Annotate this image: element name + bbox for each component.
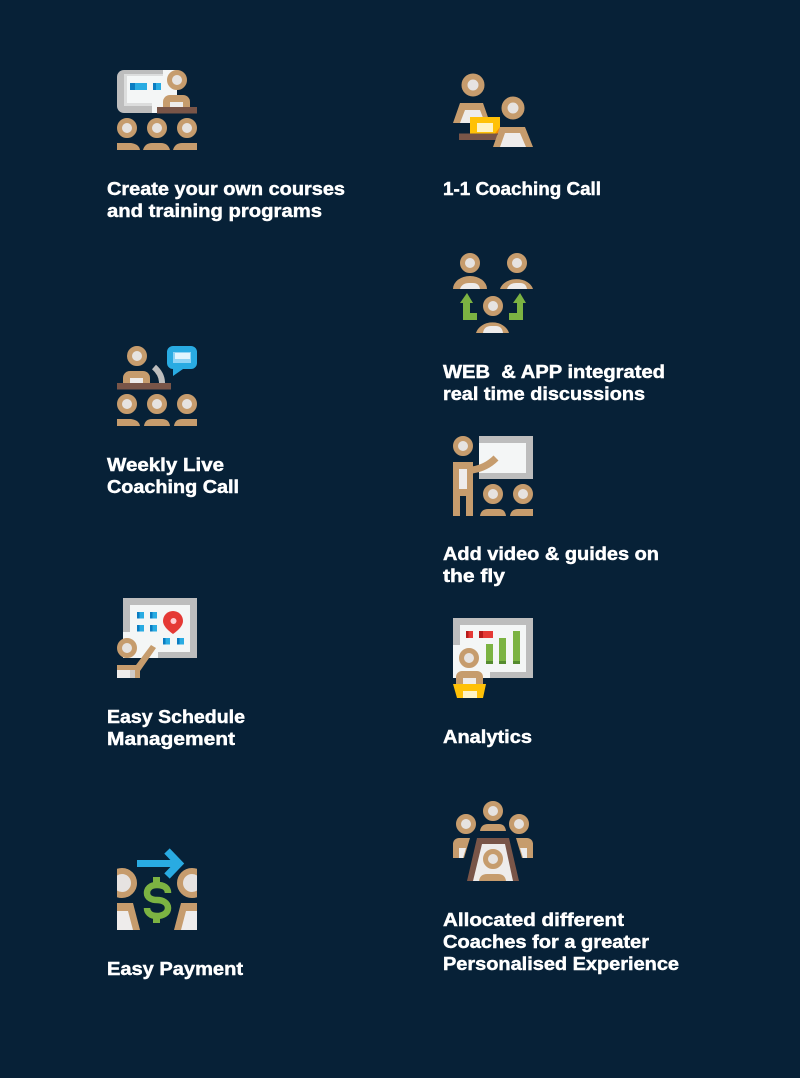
feature: add video and guides [443,436,659,586]
label: video and guides: Add video & guides on [443,544,659,564]
feature: allocated coaches [443,804,679,974]
label: schedule: Easy Schedule [107,707,245,727]
label: courses: and training programs [107,201,322,221]
label: schedule: Management [107,729,235,749]
label: video and guides [443,544,659,586]
label: video and guides: the fly [443,566,505,586]
feature: web and app discussions [443,256,665,404]
label: 1-1 coaching call: 1-1 Coaching Call [443,179,601,199]
icon: payment between two people [117,848,197,930]
icon: group meeting around table [453,804,533,881]
label: weekly live: Coaching Call [107,477,239,497]
label: allocated coaches: Allocated different [443,910,624,930]
icon: people connected with arrows [453,256,533,333]
label: courses [107,179,345,221]
label: web and app [443,362,665,404]
feature: easy payment [107,851,243,979]
icon: two people with laptop [453,76,533,147]
label: allocated coaches: Personalised Experience [443,954,679,974]
feature: weekly live coaching [107,346,239,497]
label: analytics: Analytics [443,727,532,747]
icon: speaker with chat bubble [117,346,197,426]
label: web and app: WEB & APP integrated [443,362,665,382]
feature: courses and training programs [107,70,345,221]
label: allocated coaches [443,910,679,974]
label: schedule [107,707,245,749]
label: courses: Create your own courses [107,179,345,199]
label: weekly live: Weekly Live [107,455,224,475]
icon: analytics board with bar chart [453,618,533,698]
feature: analytics [443,618,533,747]
icon: presenter at board with audience [117,70,197,150]
label: allocated coaches: Coaches for a greater [443,932,649,952]
label: payment: Easy Payment [107,959,243,979]
feature: easy schedule management [107,598,245,749]
feature: 1-1 coaching call [443,76,601,199]
icon: calendar board with map pin [117,598,197,678]
label: web and app: real time discussions [443,384,645,404]
label: weekly live [107,455,239,497]
icon: teacher at whiteboard [453,436,533,516]
